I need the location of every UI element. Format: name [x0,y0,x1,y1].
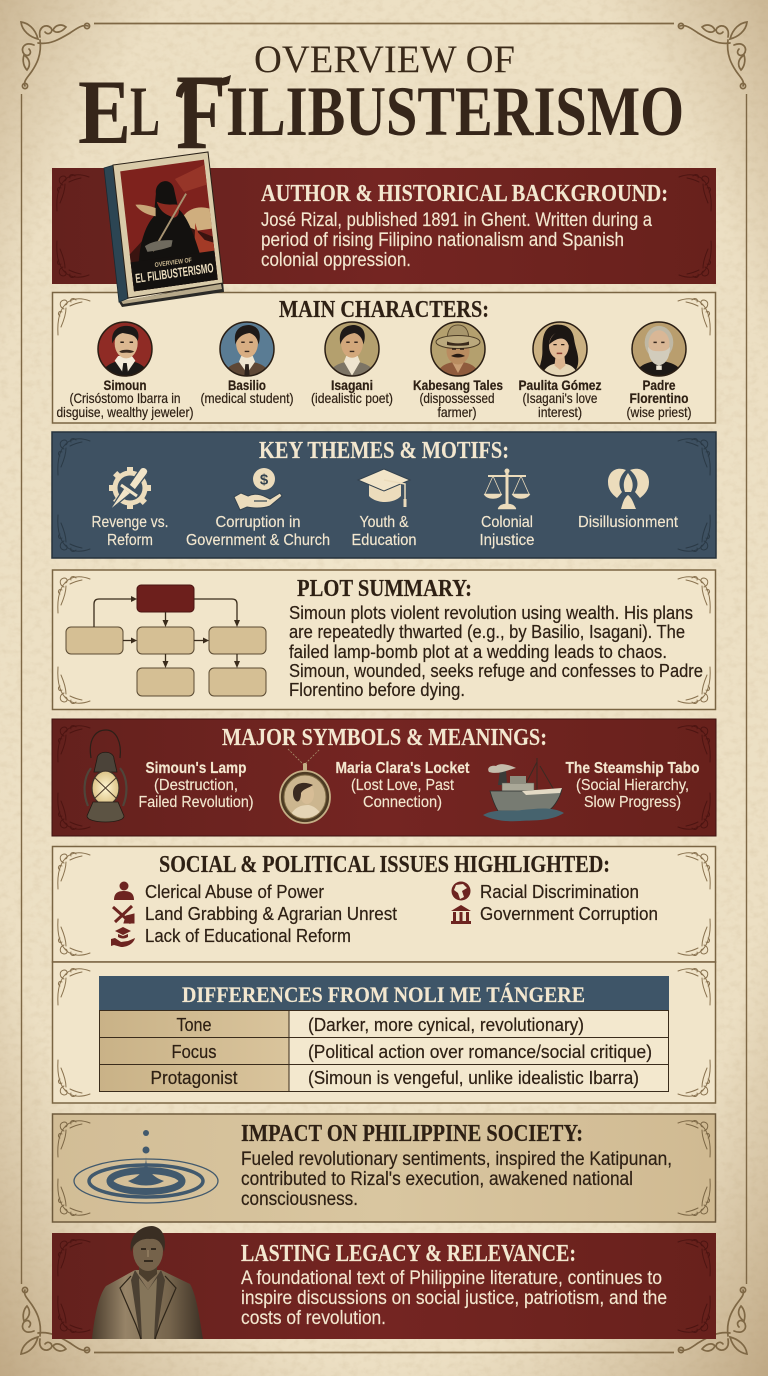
panel: lasting legacy and relevance [52,1226,716,1339]
issue: government corruption [451,904,658,924]
caption: (Destruction, [154,777,238,794]
icon: lantern [85,730,126,822]
character: Basilio [200,322,294,406]
name and role: disguise, wealthy jeweler) [56,404,194,420]
issue: land grabbing [113,904,397,924]
row: tone: (Darker, more cynical, revolutionary) [308,1015,584,1035]
name and role: Basilio [228,377,266,393]
heading: SOCIAL & POLITICAL ISSUES HIGHLIGHTED: [159,852,610,878]
label [92,514,168,549]
name and role: (dispossessed [420,390,494,406]
title line one: OVERVIEW OF [254,38,515,81]
icon: crossed tools [113,906,134,923]
issue: clerical abuse [114,882,324,902]
character: Isagani [311,322,393,406]
character: Padre Florentino [626,322,692,420]
icon: book cover: OVERVIEW OF [154,257,192,269]
label: Colonial [481,514,533,531]
character: Simoun [56,322,194,420]
body text: are repeatedly thwarted (e.g., by Basilio, Isagani). The [289,622,685,642]
portrait: Padre Florentino [632,322,686,382]
name and role: farmer) [438,404,476,420]
name and role: Paulita Gómez [518,377,602,393]
panel: key themes and motifs [52,432,716,558]
heading: MAIN CHARACTERS: [279,297,489,323]
caption: Maria Clara's Locket [336,760,470,777]
icon: hand holding coin [234,468,282,510]
body text: period of rising Filipino nationalism and Spanish [261,230,624,251]
name and role [200,377,294,406]
name and role [311,377,393,406]
label: Clerical Abuse of Power [145,882,324,902]
portrait: Kabesang Tales [431,322,485,379]
symbol: Maria Clara's locket [280,749,470,823]
row: protagonist: (Simoun is vengeful, unlike idealistic Ibarra) [308,1068,639,1088]
row: tone [176,1015,584,1035]
body text: Simoun plots violent revolution using wealth. His plans [289,603,693,623]
title line two [78,53,684,172]
name and role [518,377,602,420]
icon: cleric [114,882,134,900]
icon: globe [452,882,470,900]
label: Injustice [480,532,535,549]
body text [241,1149,672,1210]
row: focus: Focus [172,1042,216,1062]
icon: locket [280,749,330,823]
portrait: Basilio [220,322,274,382]
body text: José Rizal, published 1891 in Ghent. Written during a [261,210,652,231]
heading: PLOT SUMMARY: [297,576,472,602]
name and role: interest) [538,404,582,420]
icon: gear and dagger [109,467,151,511]
body text [241,1268,667,1329]
issue: racial discrimination [452,882,639,902]
panel: major symbols and meanings [52,719,716,836]
name and role: (idealistic poet) [311,390,393,406]
panel: author and historical background [52,168,716,284]
heading: IMPACT ON PHILIPPINE SOCIETY: [241,1121,583,1147]
body text: Simoun, wounded, seeks refuge and confesses to Padre [289,661,703,681]
caption [336,760,470,811]
icon: government building [451,905,471,924]
body text: Florentino before dying. [289,680,465,700]
name and role: (Crisóstomo Ibarra in [70,390,180,406]
body text [289,603,703,700]
caption [138,760,254,811]
name and role: Isagani [331,377,373,393]
label: Disillusionment [578,514,679,531]
row: protagonist: Protagonist [150,1068,238,1088]
icon: scales of justice [484,469,530,509]
row: focus [172,1042,652,1062]
caption: The Steamship Tabo [566,760,700,777]
caption: (Lost Love, Past [351,777,454,794]
label [186,514,330,549]
body text: costs of revolution. [241,1308,386,1329]
label: Government Corruption [480,904,658,924]
issue: educational reform [111,926,351,947]
body text: contributed to Rizal's execution, awakened national [241,1169,633,1190]
label: Reform [107,532,153,549]
portrait: Paulita Gómez [533,322,587,382]
label [352,514,416,549]
name and role: Florentino [630,390,688,406]
caption: Connection) [363,794,442,811]
heading: MAJOR SYMBOLS & MEANINGS: [222,725,547,751]
panel: plot summary [52,570,716,710]
label: Government & Church [186,532,330,549]
label: Land Grabbing & Agrarian Unrest [145,904,397,924]
comparison table [99,976,669,1092]
label: Lack of Educational Reform [145,926,351,946]
name and role: Kabesang Tales [413,377,503,393]
title [78,38,684,172]
icon: hand and cap [111,927,135,947]
caption: Failed Revolution) [138,794,254,811]
icon: book cover: EL FILIBUSTERISMO [135,261,214,286]
theme: disillusionment [578,469,679,531]
name and role [413,377,503,420]
name and role [56,377,194,420]
body text: A foundational text of Philippine literature, continues to [241,1268,662,1289]
icon: graduation cap [358,469,410,507]
character: Paulita Gómez [518,322,602,420]
icon: split faces [608,469,649,509]
label [480,514,535,549]
label: Youth & [360,514,409,531]
row: tone: Tone [176,1015,212,1035]
icon: book cover [104,152,224,307]
title line two: L [130,73,160,151]
label: Corruption in [216,514,300,531]
label: Education [352,532,416,549]
row: focus: (Political action over romance/social critique) [308,1042,652,1062]
panel: main characters [52,292,716,423]
name and role: Padre [642,377,676,393]
body text [261,210,652,271]
panel: social and political issues [52,846,716,962]
title line two: F [176,53,226,172]
row: protagonist [150,1068,639,1088]
label: Revenge vs. [92,514,168,531]
icon: Rizal statue [92,1226,203,1339]
portrait: Simoun [98,322,152,382]
character: Kabesang Tales [413,322,503,420]
flowchart [66,585,266,696]
label: Racial Discrimination [480,882,639,902]
body text: failed lamp-bomb plot at a wedding leads to chaos. [289,642,667,662]
body text: inspire discussions on social justice, patriotism, and the [241,1288,667,1309]
icon: hand holding coin: $ [260,472,269,488]
title line two: E [78,61,131,163]
theme: colonial injustice [480,469,535,549]
body text: Fueled revolutionary sentiments, inspired the Katipunan, [241,1149,672,1170]
heading: LASTING LEGACY & RELEVANCE: [241,1241,576,1267]
caption: (Social Hierarchy, [576,777,689,794]
name and role: Simoun [104,377,146,393]
theme: youth and education [352,469,416,549]
name and role: (Isagani's love [522,390,598,406]
panel: impact on Philippine society [52,1114,716,1222]
caption: Slow Progress) [584,794,681,811]
heading: KEY THEMES & MOTIFS: [259,438,509,464]
symbol: steamship Tabo [483,758,700,821]
theme: revenge vs reform [92,467,168,549]
body text: colonial oppression. [261,250,411,271]
name and role: (medical student) [200,390,294,406]
panel: differences from Noli Me Tangere [52,962,716,1103]
icon: water ripple [74,1130,218,1203]
heading: AUTHOR & HISTORICAL BACKGROUND: [261,181,668,207]
portrait: Isagani [325,322,379,382]
table header: DIFFERENCES FROM NOLI ME TÁNGERE [182,982,585,1007]
name and role [626,377,692,420]
name and role: (wise priest) [626,404,692,420]
body text: consciousness. [241,1189,358,1210]
theme: corruption [186,468,330,549]
caption: Simoun's Lamp [146,760,247,777]
caption [566,760,700,811]
symbol: Simoun's lamp [85,730,254,822]
icon: steamship [483,758,564,821]
